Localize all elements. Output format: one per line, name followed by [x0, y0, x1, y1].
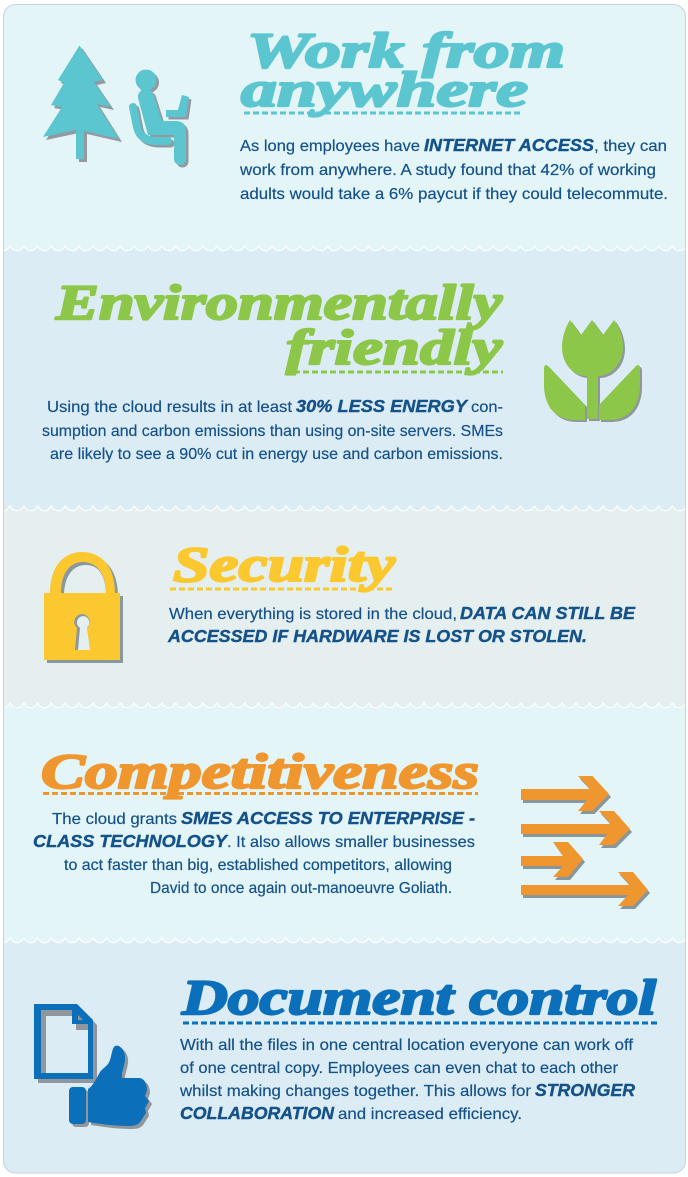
- heading: work from anywhere: Work from: [247, 22, 565, 78]
- text block: security: [167, 606, 636, 642]
- icon: four arrows: [521, 776, 650, 909]
- text block: document control: whilst making changes together. This allows for: [179, 1083, 532, 1100]
- panel: work from anywhere: [3, 4, 686, 253]
- heading: work from anywhere: [241, 22, 565, 117]
- text block: competitiveness: David to once again out-manoeuvre Goliath.: [150, 880, 452, 897]
- heading: security: Security: [173, 536, 396, 592]
- heading: competitiveness: Competitiveness: [41, 743, 479, 799]
- text block: work from anywhere: [239, 135, 668, 203]
- heading: document control: Document control: [181, 969, 656, 1025]
- heading: environmentally friendly: Environmentally: [55, 274, 503, 330]
- heading: environmentally friendly: [55, 274, 503, 375]
- text block: security: When everything is stored in the cloud,: [169, 606, 457, 623]
- icon: tulip: [544, 320, 642, 422]
- text block: competitiveness: to act faster than big, established competitors, allowing: [64, 857, 452, 874]
- text block: environmentally friendly: are likely to see a 90% cut in energy use and carbon emissions.: [50, 446, 503, 463]
- icon: pine tree: [43, 46, 122, 162]
- heading: environmentally friendly: friendly: [286, 319, 503, 375]
- text block: competitiveness: . It also allows smaller businesses: [227, 834, 475, 851]
- text block: document control: [179, 1037, 635, 1123]
- text block: work from anywhere: adults would take a 6% paycut if they could telecommute.: [240, 186, 668, 203]
- text block: work from anywhere: INTERNET ACCESS: [424, 135, 594, 155]
- text block: document control: COLLABORATION: [180, 1103, 334, 1123]
- panel: environmentally friendly: [3, 253, 686, 513]
- text block: environmentally friendly: sumption and carbon emissions than using on-site servers. SMEs: [42, 423, 503, 440]
- heading: work from anywhere: anywhere: [241, 61, 528, 117]
- text block: environmentally friendly: 30% LESS ENERGY: [296, 396, 468, 416]
- text block: document control: and increased efficiency.: [338, 1106, 522, 1123]
- icon: thumbs up: [69, 1046, 152, 1129]
- icon: padlock: [44, 552, 123, 663]
- text block: competitiveness: The cloud grants: [52, 811, 177, 828]
- text block: document control: of one central copy. Employees can even chat to each other: [180, 1060, 619, 1077]
- text block: security: ACCESSED IF HARDWARE IS LOST OR STOLEN.: [167, 626, 587, 646]
- panel: competitiveness: [3, 710, 686, 945]
- icon: document: [34, 1004, 97, 1083]
- panel: document control: [3, 945, 686, 1174]
- icon: person with laptop: [133, 70, 192, 168]
- text block: work from anywhere: , they can: [594, 138, 667, 155]
- text block: environmentally friendly: [42, 396, 503, 463]
- text block: competitiveness: [33, 808, 475, 897]
- text block: environmentally friendly: con-: [471, 399, 503, 416]
- text block: security: DATA CAN STILL BE: [460, 603, 636, 623]
- text block: work from anywhere: work from anywhere. A study found that 42% of working: [239, 162, 656, 179]
- text block: work from anywhere: As long employees have: [240, 138, 420, 155]
- text block: competitiveness: CLASS TECHNOLOGY: [33, 831, 228, 851]
- text block: document control: STRONGER: [535, 1080, 635, 1100]
- text block: document control: With all the files in one central location everyone can work off: [180, 1037, 634, 1054]
- text block: environmentally friendly: Using the cloud results in at least: [47, 399, 293, 416]
- panel: security: [3, 513, 686, 710]
- text block: competitiveness: SMES ACCESS TO ENTERPRISE -: [181, 808, 475, 828]
